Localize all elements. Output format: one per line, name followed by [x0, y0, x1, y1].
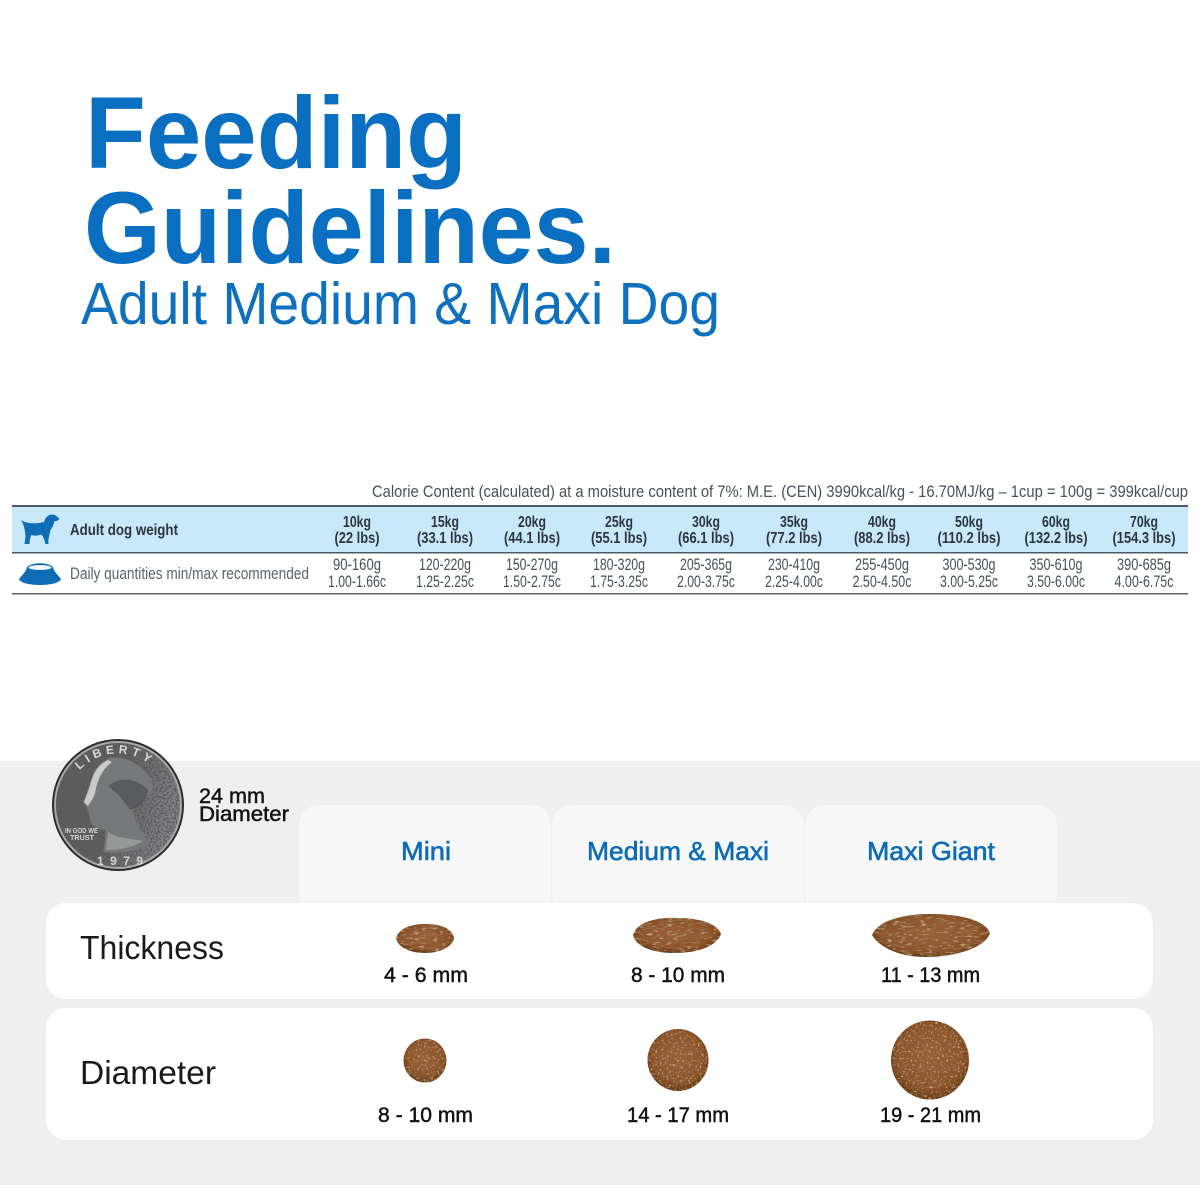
coin diameter label: 24 mm — [199, 785, 265, 808]
tab: Maxi Giant — [805, 805, 1057, 915]
column 30kg — [677, 514, 735, 591]
column 20kg — [503, 514, 561, 591]
value: mini diameter: 8 - 10 mm — [378, 1104, 473, 1127]
value: medium diameter: 14 - 17 mm — [627, 1104, 729, 1127]
icon: dog — [21, 514, 60, 544]
column 40kg: (88.2 lbs) — [854, 530, 910, 547]
column 40kg: 255-450g — [855, 556, 909, 574]
column 35kg: 230-410g — [768, 556, 820, 574]
column 30kg: 30kg — [692, 514, 720, 531]
column 60kg: (132.2 lbs) — [1024, 530, 1088, 547]
column 70kg: 390-685g — [1117, 556, 1171, 574]
column 50kg: 3.00-5.25c — [940, 573, 998, 591]
column 15kg — [416, 514, 474, 591]
column 70kg: 70kg — [1130, 514, 1158, 531]
column 70kg: (154.3 lbs) — [1112, 530, 1176, 547]
column 20kg: 20kg — [518, 514, 546, 531]
value: mini thickness: 4 - 6 mm — [384, 964, 468, 987]
thickness heading: Thickness — [80, 929, 224, 966]
column 60kg: 3.50-6.00c — [1027, 573, 1085, 591]
coin diameter label: Diameter — [199, 803, 289, 826]
column 50kg: 50kg — [955, 514, 983, 531]
icon: quarter coin: TRUST — [70, 835, 95, 842]
tab: Maxi Giant: Maxi Giant — [867, 836, 996, 866]
icon: quarter coin — [52, 739, 184, 871]
tab: Mini — [299, 805, 551, 915]
coin diameter label — [199, 785, 289, 826]
title: Feeding Guidelines: Feeding — [85, 76, 467, 190]
kibble: mini thickness — [396, 924, 454, 953]
panel: thickness row — [46, 903, 1153, 999]
column 25kg: 180-320g — [593, 556, 645, 574]
column 20kg: (44.1 lbs) — [504, 530, 560, 547]
column 15kg: 15kg — [431, 514, 459, 531]
diameter heading: Diameter — [80, 1054, 216, 1091]
column 30kg: (66.1 lbs) — [678, 530, 734, 547]
column 15kg: 120-220g — [419, 556, 471, 574]
column 20kg: 1.50-2.75c — [503, 573, 561, 591]
icon: bowl — [19, 563, 61, 585]
value: maxi giant diameter: 19 - 21 mm — [880, 1104, 981, 1127]
column 25kg: 1.75-3.25c — [590, 573, 648, 591]
column 70kg — [1112, 514, 1176, 591]
column 35kg: 2.25-4.00c — [765, 573, 823, 591]
column 25kg: 25kg — [605, 514, 633, 531]
column 25kg: (55.1 lbs) — [591, 530, 647, 547]
kibble: medium thickness — [633, 918, 721, 953]
column 50kg — [938, 514, 1000, 591]
column 60kg: 350-610g — [1030, 556, 1082, 574]
column 60kg: 60kg — [1042, 514, 1070, 531]
column 10kg — [328, 514, 386, 591]
tab: Mini: Mini — [401, 836, 451, 866]
column 20kg: 150-270g — [506, 556, 558, 574]
value: maxi giant thickness: 11 - 13 mm — [881, 964, 980, 987]
column 60kg — [1024, 514, 1088, 591]
title: Feeding Guidelines — [84, 76, 616, 285]
kibble: mini diameter — [404, 1038, 446, 1082]
kibble: maxi giant diameter — [891, 1020, 969, 1100]
icon: quarter coin: LIBERTY — [74, 744, 153, 770]
column 50kg: 300-530g — [942, 556, 996, 574]
daily quantities label: Daily quantities min/max recommended — [70, 565, 309, 583]
table header band — [12, 506, 1188, 552]
column 50kg: (110.2 lbs) — [938, 530, 1000, 547]
column 40kg — [852, 514, 912, 591]
column 15kg: (33.1 lbs) — [417, 530, 473, 547]
feeding table — [12, 505, 1188, 594]
column 30kg: 2.00-3.75c — [677, 573, 735, 591]
column 15kg: 1.25-2.25c — [416, 573, 474, 591]
column 30kg: 205-365g — [680, 556, 732, 574]
panel: kibble size background — [0, 761, 1200, 1185]
column 40kg: 2.50-4.50c — [852, 573, 912, 591]
kibble: maxi giant thickness — [872, 914, 990, 957]
value: medium thickness: 8 - 10 mm — [631, 964, 725, 987]
subtitle: Adult Medium & Maxi Dog — [81, 271, 720, 337]
column 35kg: (77.2 lbs) — [766, 530, 822, 547]
column 35kg: 35kg — [780, 514, 808, 531]
column 70kg: 4.00-6.75c — [1114, 573, 1174, 591]
column 10kg: 90-160g — [333, 556, 381, 574]
column 10kg: (22 lbs) — [334, 530, 380, 547]
column 25kg — [590, 514, 648, 591]
column 10kg: 1.00-1.66c — [328, 573, 386, 591]
icon: quarter coin: IN GOD WE — [65, 828, 98, 835]
kibble: medium diameter — [648, 1029, 708, 1091]
panel: diameter row — [46, 1008, 1153, 1140]
column 35kg — [765, 514, 823, 591]
tab: Medium & Maxi: Medium & Maxi — [587, 836, 769, 866]
tab: Medium & Maxi — [552, 805, 804, 915]
column 40kg: 40kg — [868, 514, 896, 531]
icon: quarter coin: 1979 — [97, 854, 143, 868]
adult dog weight label: Adult dog weight — [70, 522, 179, 539]
column 10kg: 10kg — [343, 514, 371, 531]
title: Feeding Guidelines: Guidelines. — [84, 171, 616, 285]
